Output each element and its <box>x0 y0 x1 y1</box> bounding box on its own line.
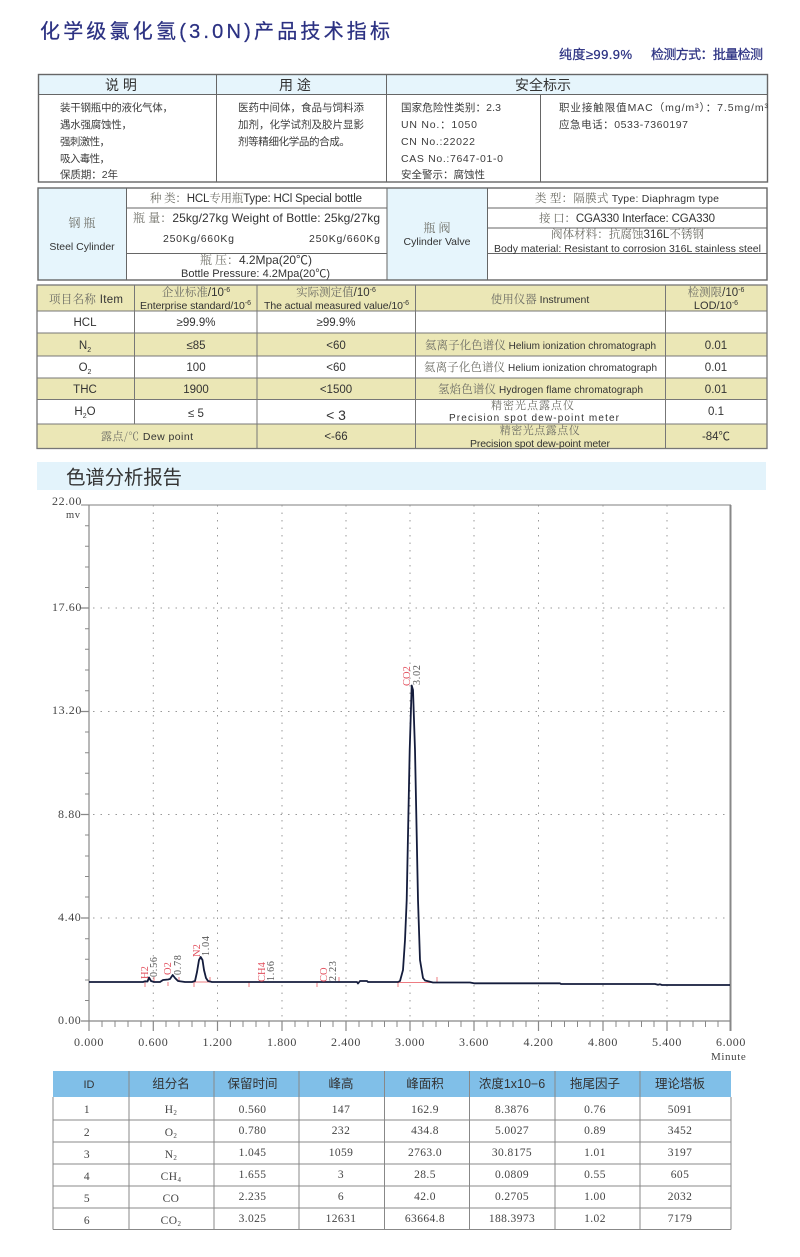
text block: exposure limit and emergency phone: 应急电话：0533-7360197 <box>559 118 688 131</box>
y axis labels: mv <box>66 510 81 521</box>
row 4 <box>84 1169 689 1184</box>
row: H2O: 0.1 <box>708 406 724 418</box>
chromatogram chart <box>52 494 746 1063</box>
table header: 组分名 <box>152 1076 190 1091</box>
row: dew point: Precision spot dew-point meter <box>470 438 610 450</box>
row: H2O: 2 <box>83 413 87 420</box>
peak labels: H2 <box>140 966 151 979</box>
text block: hazard identifiers: 国家危险性类别：2.3 <box>401 101 501 114</box>
row 1: H <box>165 1104 173 1116</box>
text block: exposure limit and emergency phone <box>559 101 768 131</box>
cylinder weight: 瓶 量：25kg/27kg Weight of Bottle: 25kg/27kg <box>133 209 380 226</box>
row 3: 3 <box>84 1149 90 1161</box>
cylinder pressure: 瓶 压：4.2Mpa(20℃) <box>200 251 312 268</box>
peak labels: 2.23 <box>328 960 339 981</box>
cylinder valve label: Cylinder Valve <box>404 236 471 248</box>
row 3: 30.8175 <box>492 1147 532 1159</box>
row 2: 2 <box>84 1127 90 1139</box>
row 5: 6 <box>338 1191 344 1203</box>
row 1: 8.3876 <box>495 1104 529 1116</box>
row 4: 3 <box>338 1169 344 1181</box>
row 6: 2 <box>177 1220 181 1228</box>
table header row: -6 <box>370 287 376 294</box>
text block: hazard identifiers: CN No.:22022 <box>401 136 475 148</box>
row 3 <box>84 1147 692 1162</box>
row: N2: ≤85 <box>186 340 206 352</box>
cylinder type: 种 类：HCL专用瓶Type: HCl Special bottle <box>150 190 362 206</box>
row: HCL <box>73 317 355 329</box>
cylinder weight: 250Kg/660Kg <box>309 233 380 245</box>
row: O2: 氦离子化色谱仪 Helium ionization chromatograph <box>424 359 657 375</box>
x axis labels: 5.400 <box>652 1035 682 1049</box>
purity and test method line: 纯度≥99.9% <box>559 47 632 62</box>
title: 化学级氯化氢(3.0N)产品技术指标 <box>40 20 390 43</box>
row 4: 4 <box>84 1171 90 1183</box>
peak labels <box>140 664 423 982</box>
section heading band: chromatography report: 色谱分析报告 <box>66 467 182 489</box>
row 1: 147 <box>332 1104 350 1116</box>
x axis labels: 3.000 <box>395 1035 425 1049</box>
row 3: 3197 <box>668 1147 692 1159</box>
table header row: 检测限/10 <box>688 284 738 300</box>
row 1: 162.9 <box>411 1104 439 1116</box>
text block: hazard identifiers: CAS No.:7647-01-0 <box>401 153 503 165</box>
y axis labels <box>52 494 82 1027</box>
table header: 拖尾因子 <box>570 1077 620 1091</box>
text block: hazard identifiers <box>401 101 503 181</box>
row: O2: 100 <box>186 362 206 374</box>
text block: exposure limit and emergency phone: 职业接触限值MAC（mg/m³）：7.5mg/m³ <box>559 101 768 114</box>
x axis labels: 6.000 <box>716 1035 746 1049</box>
row: THC: 1900 <box>183 384 209 396</box>
table header <box>84 1076 705 1091</box>
row 2: 0.89 <box>584 1125 606 1137</box>
row 4: CH <box>161 1171 177 1183</box>
valve body material: Body material: Resistant to corrosion 316L stainless steel <box>494 243 761 255</box>
row 3: N <box>165 1149 173 1161</box>
steel cylinder label <box>49 214 115 253</box>
row: THC <box>73 381 727 397</box>
text block: use <box>238 101 364 148</box>
row 6: CO <box>161 1215 177 1227</box>
table header: 保留时间 <box>227 1077 278 1091</box>
row: O2: <60 <box>326 362 346 374</box>
row 6: 7179 <box>668 1213 692 1225</box>
row: HCL: ≥99.9% <box>317 317 355 329</box>
row 3: 1.01 <box>584 1147 606 1159</box>
cylinder weight: 250Kg/660Kg <box>163 233 234 245</box>
row 3: 1059 <box>329 1147 353 1159</box>
table header: 理论塔板 <box>655 1077 705 1091</box>
steel cylinder label: Steel Cylinder <box>49 241 115 253</box>
peak labels: CH4 <box>257 961 268 982</box>
panel: cylinder and valve table <box>38 188 767 280</box>
text block: description: 装干钢瓶中的液化气体， <box>60 101 173 114</box>
x axis labels: 0.600 <box>138 1035 168 1049</box>
row: O2: 0.01 <box>705 362 727 374</box>
row 5: 1.00 <box>584 1191 606 1203</box>
panel: peak results table <box>53 1071 731 1230</box>
peak labels: O2 <box>163 962 174 975</box>
table header row: LOD/10 <box>694 300 732 312</box>
axes and frame <box>81 505 731 1031</box>
row: dew point <box>101 422 731 450</box>
row: THC: THC <box>73 384 97 396</box>
row 1: 2 <box>173 1109 177 1117</box>
text block: use: 加剂，化学试剂及胶片显影 <box>238 118 364 131</box>
cylinder valve label: 瓶 阀 <box>423 219 451 236</box>
table header row <box>49 284 744 312</box>
row: N2: 0.01 <box>705 340 727 352</box>
steel cylinder label: 钢 瓶 <box>68 214 96 231</box>
peak labels: 0.78 <box>173 954 184 975</box>
peak labels: 1.66 <box>266 960 277 981</box>
row: N2: 氦离子化色谱仪 Helium ionization chromatograph <box>425 337 656 353</box>
row 5: 42.0 <box>414 1191 436 1203</box>
row 1: 1 <box>84 1104 90 1116</box>
y axis labels: 22.00 <box>52 494 82 508</box>
valve type: 类 型：隔膜式 Type: Diaphragm type <box>535 190 719 206</box>
table header row: -6 <box>224 287 230 294</box>
row 3: 2 <box>173 1154 177 1162</box>
table header row: 项目名称 Item <box>49 291 123 307</box>
row 2: O <box>165 1127 173 1139</box>
table header row: 企业标准/10 <box>162 284 224 300</box>
table header row: The actual measured value/10 <box>264 300 403 312</box>
row: O2: O <box>79 362 88 374</box>
row 1: 0.76 <box>584 1104 606 1116</box>
peak labels: 1.04 <box>201 935 212 956</box>
row 6: 188.3973 <box>489 1213 535 1225</box>
row 3: 1.045 <box>239 1147 266 1159</box>
x axis labels: 4.200 <box>524 1035 554 1049</box>
peak labels: 0.56 <box>149 956 160 977</box>
row: N2 <box>79 337 727 354</box>
text block: description: 遇水强腐蚀性， <box>60 118 132 131</box>
cylinder valve label <box>404 219 471 248</box>
row 2: 3452 <box>668 1125 692 1137</box>
x axis labels: 1.200 <box>202 1035 232 1049</box>
grid lines <box>93 505 731 1021</box>
row 4: 4 <box>177 1176 181 1184</box>
row: THC: 0.01 <box>705 384 727 396</box>
table header: 峰高 <box>328 1076 354 1091</box>
row 1: 0.560 <box>239 1104 266 1116</box>
text block: description: 吸入毒性， <box>60 152 110 165</box>
row 5: 2032 <box>668 1191 692 1203</box>
text block: use: 医药中间体，食品与饲料添 <box>238 101 364 114</box>
row 4: 605 <box>671 1169 689 1181</box>
table header row: -6 <box>732 300 738 307</box>
table header: ID <box>84 1079 95 1091</box>
peak labels: CO <box>319 967 330 982</box>
header: description: 说 明 <box>105 77 137 93</box>
row: HCL: HCL <box>73 317 97 329</box>
x axis labels: 1.800 <box>267 1035 297 1049</box>
text block: description <box>60 101 173 181</box>
row: dew point: 精密光点露点仪 <box>500 422 580 438</box>
y axis labels: 8.80 <box>58 807 81 821</box>
row 2: 0.780 <box>239 1125 266 1137</box>
row: O2 <box>79 359 727 376</box>
peak labels: CO2 <box>402 666 413 686</box>
text block: hazard identifiers: 安全警示：腐蚀性 <box>401 168 485 181</box>
row 6: 63664.8 <box>405 1213 445 1225</box>
peak labels: N2 <box>192 944 203 957</box>
valve body material: 阀体材料：抗腐蚀316L不锈钢 <box>551 226 704 242</box>
row: H2O: H <box>74 406 83 418</box>
cylinder pressure <box>181 251 330 280</box>
row: THC: <1500 <box>320 384 352 396</box>
row: dew point: 露点/℃ Dew point <box>101 428 193 444</box>
row: THC: 氢焰色谱仪 Hydrogen flame chromatograph <box>438 381 643 397</box>
row 2: 5.0027 <box>495 1125 529 1137</box>
x axis labels: 4.800 <box>588 1035 618 1049</box>
row 6 <box>84 1213 692 1228</box>
row 4: 0.55 <box>584 1169 606 1181</box>
table header row: -6 <box>403 300 409 307</box>
valve interface: 接 口：CGA330 Interface: CGA330 <box>539 210 715 226</box>
row 5: 0.2705 <box>495 1191 529 1203</box>
row: H2O: 精密光点露点仪 <box>491 397 575 413</box>
valve body material <box>494 226 761 255</box>
text block: description: 强刺激性， <box>60 135 110 148</box>
text block: hazard identifiers: UN No.：1050 <box>401 119 477 131</box>
panel: description, use and safety table <box>38 74 768 182</box>
row 6: 6 <box>84 1215 90 1227</box>
section heading band: chromatography report <box>37 462 766 490</box>
x axis labels: 0.000 <box>74 1035 104 1049</box>
row 3: 2763.0 <box>408 1147 442 1159</box>
text block: use: 剂等精细化学品的合成。 <box>238 135 350 148</box>
header: use: 用 途 <box>279 77 311 93</box>
row: N2: 2 <box>87 347 91 354</box>
row: dew point: -84℃ <box>702 431 731 443</box>
row 6: 12631 <box>326 1213 356 1225</box>
x axis labels: 3.600 <box>459 1035 489 1049</box>
row 4: 0.0809 <box>495 1169 529 1181</box>
purity and test method line <box>559 47 763 62</box>
table header row: -6 <box>738 287 744 294</box>
row 1 <box>84 1104 692 1117</box>
table header: 浓度1x10−6 <box>479 1076 545 1091</box>
y axis labels: 0.00 <box>58 1013 81 1027</box>
row 5 <box>84 1191 692 1205</box>
row 5: 2.235 <box>239 1191 266 1203</box>
table header: 峰面积 <box>406 1077 444 1091</box>
row: N2: N <box>79 340 87 352</box>
row: H2O <box>74 397 724 424</box>
row 6: 3.025 <box>239 1213 266 1225</box>
y axis labels: 17.60 <box>52 600 82 614</box>
peak labels: 3.02 <box>412 664 423 685</box>
row: dew point: <-66 <box>324 431 348 443</box>
text block: description: 保质期：2年 <box>60 168 118 181</box>
row 1: 5091 <box>668 1104 692 1116</box>
row 4: 28.5 <box>414 1169 436 1181</box>
row 2: 232 <box>332 1125 350 1137</box>
header: safety: 安全标示 <box>515 77 571 93</box>
row 2: 434.8 <box>411 1125 439 1137</box>
row: H2O: ≤ 5 <box>188 408 204 420</box>
x axis labels: Minute <box>711 1051 746 1063</box>
x axis labels <box>74 1035 746 1063</box>
table header row: -6 <box>245 300 251 307</box>
row 5: CO <box>163 1193 179 1205</box>
table header row: 实际测定值/10 <box>296 284 370 300</box>
row 6: 1.02 <box>584 1213 606 1225</box>
row 2 <box>84 1125 692 1140</box>
purity and test method line: 检测方式：批量检测 <box>651 47 763 62</box>
row 4: 1.655 <box>239 1169 266 1181</box>
cylinder pressure: Bottle Pressure: 4.2Mpa(20℃) <box>181 268 330 280</box>
x axis labels: 2.400 <box>331 1035 361 1049</box>
row: HCL: ≥99.9% <box>177 317 215 329</box>
row: H2O: < 3 <box>326 407 346 423</box>
y axis labels: 4.40 <box>58 910 81 924</box>
row: N2: <60 <box>326 340 346 352</box>
row 2: 2 <box>173 1132 177 1140</box>
table header row: Enterprise standard/10 <box>140 300 245 312</box>
chromatogram signal trace <box>89 686 730 985</box>
cylinder weight <box>133 209 380 245</box>
row: H2O: O <box>87 406 96 418</box>
row: H2O: Precision spot dew-point meter <box>449 413 620 424</box>
table header row: 使用仪器 Instrument <box>491 291 589 307</box>
peak integration markers <box>145 977 437 987</box>
y axis labels: 13.20 <box>52 703 82 717</box>
row 5: 5 <box>84 1193 90 1205</box>
row: O2: 2 <box>88 369 92 376</box>
panel: specification table <box>37 284 767 450</box>
